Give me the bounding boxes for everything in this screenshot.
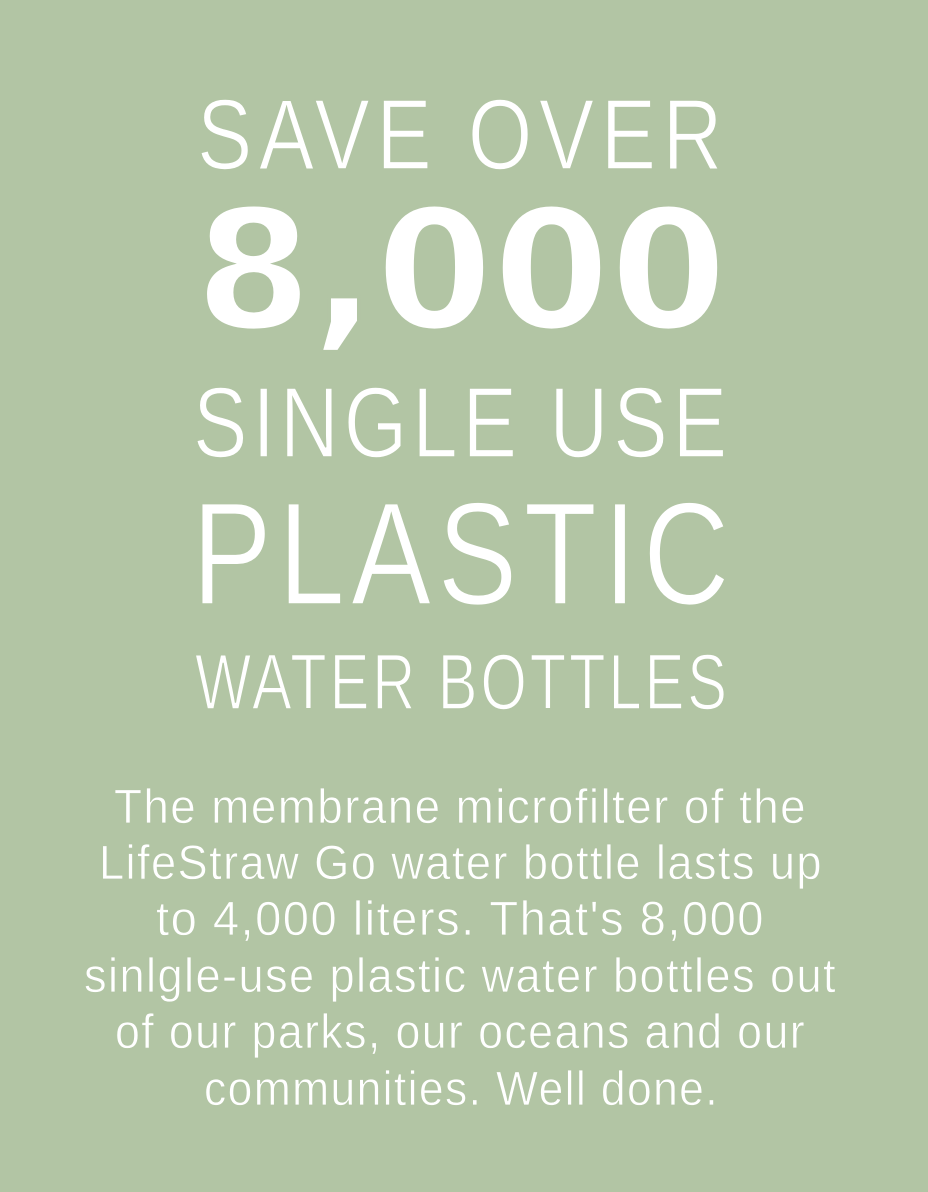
body paragraph: LifeStraw Go water bottle lasts up xyxy=(99,837,823,890)
heading line: plastic: PLASTIC xyxy=(192,472,736,635)
heading line: water bottles: WATER BOTTLES xyxy=(195,637,730,726)
body paragraph: to 4,000 liters. That's 8,000 xyxy=(156,893,765,946)
body paragraph xyxy=(84,781,837,1116)
body paragraph: of our parks, our oceans and our xyxy=(115,1006,806,1059)
body paragraph: communities. Well done. xyxy=(204,1063,719,1116)
heading xyxy=(192,79,736,726)
big number: 8,000: 8,000 xyxy=(195,175,727,368)
body paragraph: The membrane microfilter of the xyxy=(114,781,807,834)
heading line: single use: SINGLE USE xyxy=(193,367,732,479)
body paragraph: sinlgle-use plastic water bottles out xyxy=(84,950,837,1003)
heading line: save over: SAVE OVER xyxy=(197,79,729,191)
